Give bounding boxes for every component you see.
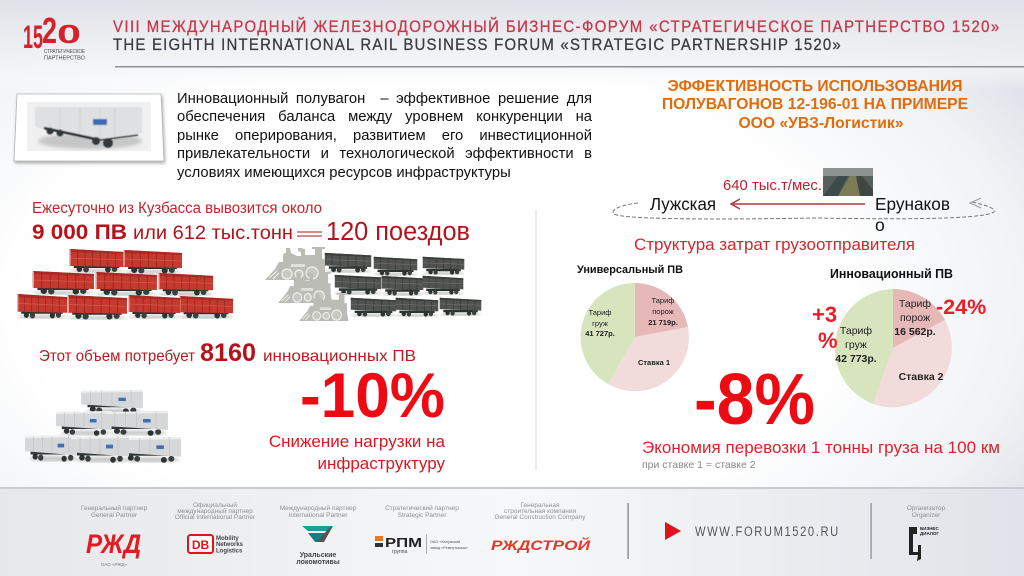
logo: Ural Locomotives: локомотивы [296, 559, 340, 566]
route diagram [613, 168, 994, 235]
footer band [0, 487, 1024, 576]
footer partners captions: International Partner [289, 512, 348, 519]
caption: infrastructure load [269, 432, 446, 473]
logo: 1520: 2 [42, 10, 57, 51]
pie chart: innovative wagon: Тариф [840, 325, 872, 337]
efficiency heading: ПОЛУВАГОНОВ 12-196-01 НА ПРИМЕРЕ [662, 96, 968, 113]
text: 8160 innovative wagons: инновационных ПВ [263, 348, 416, 365]
route diagram: Лужская [650, 194, 716, 214]
caption: cost saving [642, 439, 1000, 471]
caption: infrastructure load: Снижение нагрузки на [269, 432, 446, 451]
caption: cost saving: при ставке 1 = ставке 2 [642, 459, 756, 471]
logo: DB: Mobility [216, 536, 239, 542]
text: 8160 innovative wagons [39, 339, 416, 367]
pie chart: innovative wagon: Тариф [899, 298, 931, 310]
logo: 1520: СТРАТЕГИЧЕСКОЕ [44, 49, 85, 55]
stat: -8%: -8% [694, 360, 815, 440]
footer partners captions: General Construction Company [494, 514, 586, 521]
logo: 1520: 0 [57, 19, 81, 49]
caption: infrastructure load: инфраструктуру [317, 454, 445, 473]
daily export text: 120 поездов [326, 218, 470, 246]
organizer block [907, 505, 946, 561]
intro paragraph [0, 0, 1024, 200]
pie chart: innovative wagon: Инновационный ПВ [830, 267, 953, 281]
intro paragraph: обеспечения баланса между уровнем конкуренции на [177, 109, 592, 125]
delta: +3% [812, 302, 838, 353]
cost structure heading: Структура затрат грузоотправителя [634, 236, 915, 254]
footer partners captions: Стратегический партнер [385, 504, 459, 512]
text: 8160 innovative wagons: 8160 [200, 339, 256, 367]
footer partners captions: General Partner [91, 512, 138, 519]
header title: THE EIGHTH INTERNATIONAL RAIL BUSINESS FORUM «STRATEGIC PARTNERSHIP 1520» [113, 36, 841, 54]
footer partners captions: Official International Partner [175, 514, 256, 521]
logo: DB: Logistics [216, 548, 243, 554]
pie chart: innovative wagon: 42 773р. [835, 353, 877, 365]
organizer block: Organizer [912, 512, 941, 519]
red wagons group [17, 249, 233, 320]
logo: RPM group: ОАО «Калужский [430, 540, 460, 544]
logo: RZhDstroy: РЖДСТРОЙ [491, 536, 591, 553]
logo: RPM group: группа [392, 549, 407, 555]
logo: RPM group [375, 534, 468, 555]
pie chart: innovative wagon: 16 562р. [894, 326, 936, 338]
route diagram: о [875, 215, 885, 235]
logo: 1520: ПАРТНЕРСТВО [44, 56, 86, 62]
delta: +3%: +3 [812, 302, 837, 327]
pie chart: innovative wagon: порож [900, 312, 930, 324]
efficiency heading [662, 78, 968, 132]
organizer block: БИЗНЕС [920, 526, 940, 531]
pie chart: innovative wagon: Ставка 2 [899, 371, 944, 383]
organizer block: Организатор [907, 505, 946, 512]
pie chart: universal wagon: порож [652, 307, 674, 316]
logo: RPM group: завод «Ремпутьмаш» [430, 546, 468, 550]
framed wagon photo [14, 94, 164, 161]
pie chart: universal wagon: Ставка 1 [638, 358, 670, 367]
footer partners captions: международный партнер [177, 507, 253, 515]
white wagons group [25, 390, 181, 463]
logo: DB: DB [192, 538, 209, 552]
logo: RZD: РЖД [86, 529, 141, 559]
trains: locomotives and grey wagons [265, 247, 481, 321]
pie chart: universal wagon: Универсальный ПВ [577, 264, 683, 276]
footer partners captions: Генеральная [520, 502, 560, 509]
intro paragraph: рынке оперирования, развитием его инвестиционной [177, 128, 592, 144]
logo: RPM group: РПМ [385, 535, 422, 550]
daily export text: 9 000 ПВ [32, 220, 127, 244]
footer partners captions: строительная компания [504, 508, 576, 515]
route diagram: 640 тыс.т/мес. [723, 177, 822, 194]
footer partners captions: Официальный [193, 501, 237, 509]
pie chart: universal wagon: Тариф [652, 296, 674, 305]
intro paragraph: привлекательности и технологической эффективности в [177, 146, 592, 162]
route diagram: Ерунаков [875, 194, 950, 214]
footer partners captions: Strategic Partner [398, 512, 447, 519]
logo: 1520: 15 [23, 19, 43, 55]
pie chart: universal wagon: 41 727р. [585, 329, 615, 338]
pie chart: universal wagon: груж [592, 319, 608, 328]
pie chart: innovative wagon [830, 267, 953, 407]
logo: DB [188, 535, 244, 554]
organizer block: ДИАЛОГ [920, 531, 939, 536]
logo: RZD: ОАО «РЖД» [101, 562, 128, 567]
footer partners captions: Генеральный партнер [81, 504, 148, 512]
logo: 1520 [23, 10, 86, 62]
text: 8160 innovative wagons: Этот объем потребует [39, 348, 196, 365]
logo: DB: Networks [216, 542, 244, 548]
intro paragraph: Инновационный полувагон – эффективное решение для [177, 91, 592, 107]
delta: -24%: -24% [936, 295, 986, 319]
daily export text [32, 200, 470, 246]
intro paragraph: условиях имеющихся ресурсов инфраструктуры [177, 165, 511, 181]
pie chart: innovative wagon: груж [845, 339, 867, 351]
footer partners captions: Международный партнер [280, 504, 357, 512]
caption: cost saving: Экономия перевозки 1 тонны груза на 100 км [642, 439, 1000, 457]
efficiency heading: ЭФФЕКТИВНОСТЬ ИСПОЛЬЗОВАНИЯ [668, 78, 962, 95]
website: WWW.FORUM1520.RU [695, 524, 838, 539]
header title [113, 16, 999, 54]
logo: Ural Locomotives [296, 526, 340, 566]
icon: red arrow [665, 522, 681, 540]
header title: VIII МЕЖДУНАРОДНЫЙ ЖЕЛЕЗНОДОРОЖНЫЙ БИЗНЕС-ФОРУМ «СТРАТЕГИЧЕСКОЕ ПАРТНЕРСТВО 1520» [113, 16, 999, 36]
pie chart: universal wagon [577, 264, 689, 391]
stat: -10%: -10% [300, 361, 445, 431]
logo: Ural Locomotives: Уральские [300, 552, 336, 559]
pie chart: universal wagon: Тариф [589, 308, 611, 317]
efficiency heading: ООО «УВЗ-Логистик» [738, 115, 904, 132]
daily export text: или 612 тыс.тонн [133, 223, 293, 244]
footer partners captions [81, 501, 586, 521]
delta: +3%: % [818, 328, 838, 353]
pie chart: universal wagon: 21 719р. [648, 318, 678, 327]
daily export text: Ежесуточно из Кузбасса вывозится около [32, 200, 322, 217]
